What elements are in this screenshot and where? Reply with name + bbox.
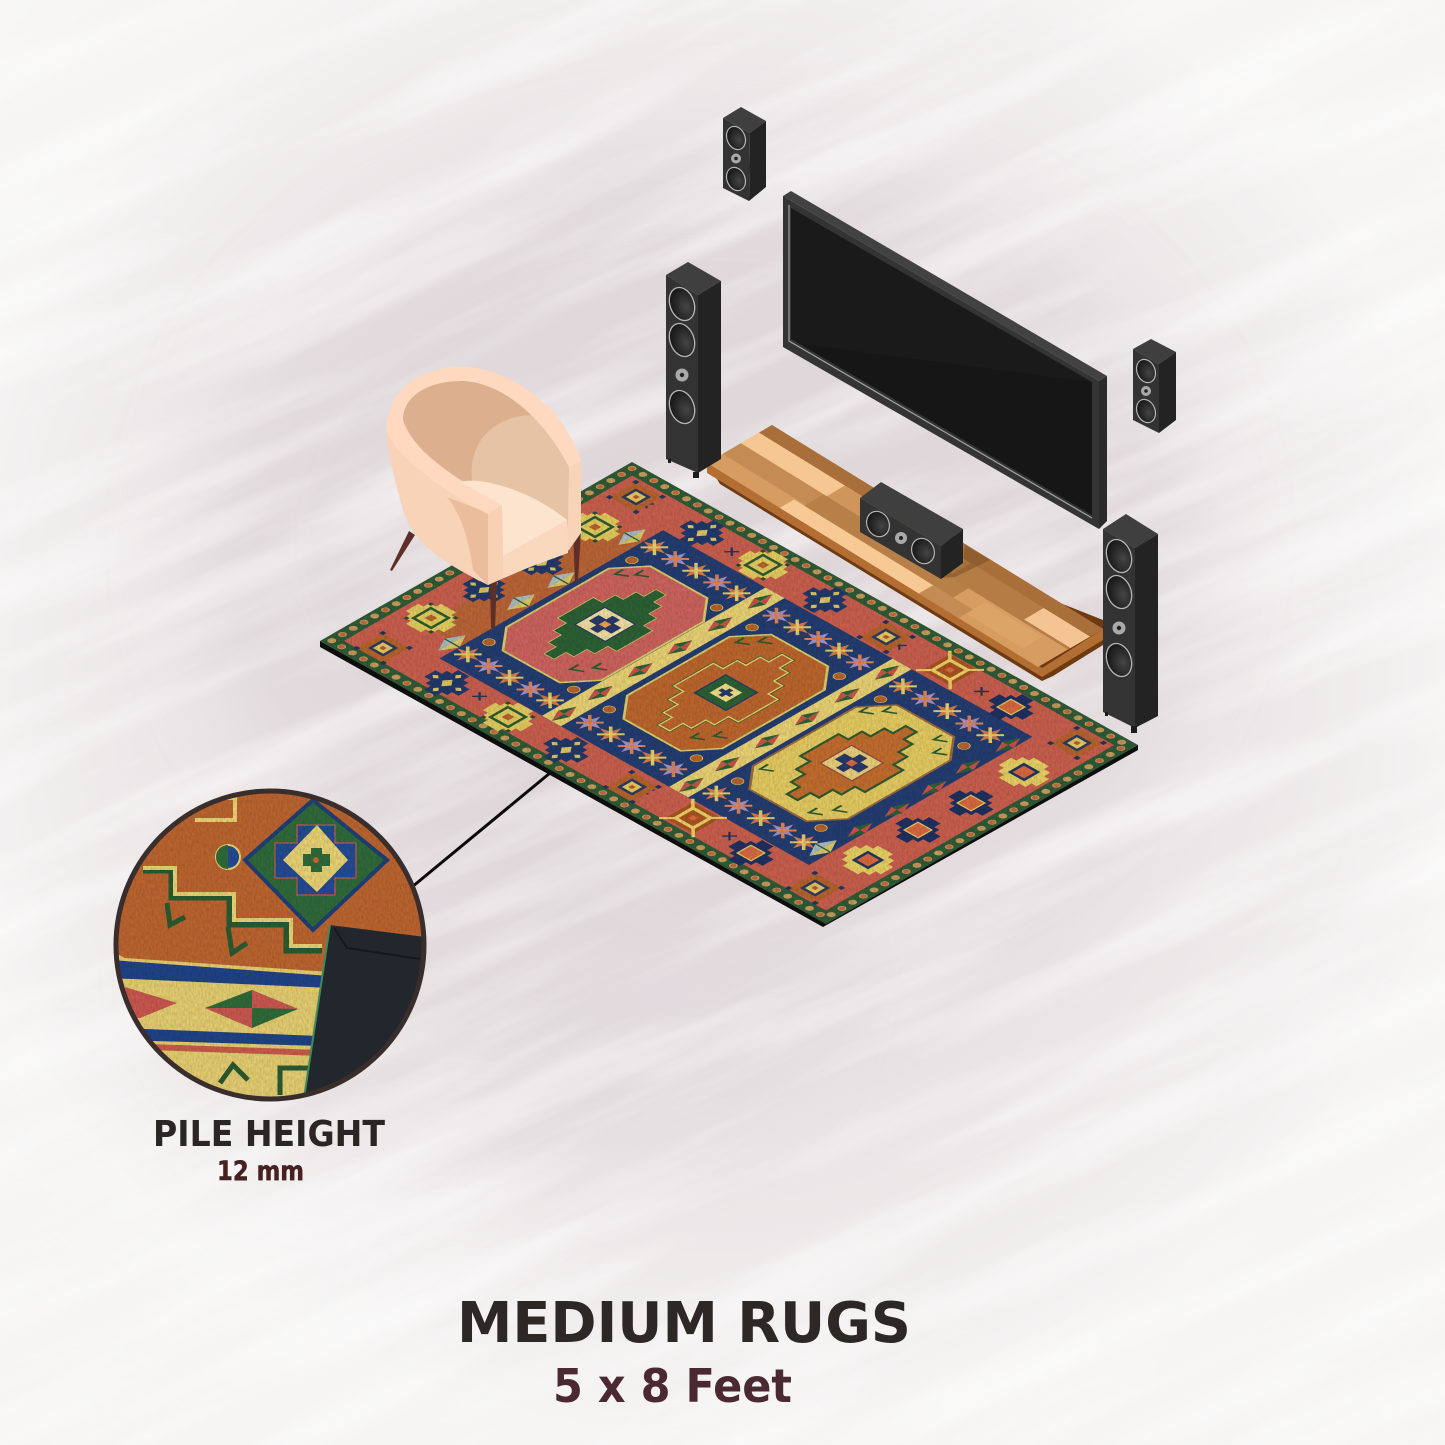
small navy stars	[446, 535, 1012, 854]
stepped yellow lines	[143, 870, 322, 950]
border motifs: short ends	[395, 506, 1060, 881]
bottom hook	[220, 1065, 248, 1083]
medallion three: yellow	[731, 694, 973, 832]
stripe diamonds	[546, 591, 905, 795]
medallion one: salmon	[484, 556, 726, 693]
chair side shadow	[447, 497, 488, 585]
tv stand	[707, 425, 1103, 681]
title	[457, 1291, 911, 1413]
right small speaker	[1133, 339, 1176, 433]
chair front panel	[503, 520, 568, 577]
right tower speaker	[1102, 514, 1158, 733]
leader line	[412, 773, 550, 887]
armchair	[386, 367, 581, 628]
yellow lower band	[118, 954, 322, 1096]
band diamonds	[205, 990, 298, 1028]
chair body	[386, 367, 581, 585]
border motifs: long top edge	[606, 480, 1107, 760]
subtitle: 5 x 8 Feet	[553, 1359, 792, 1413]
medallion two: orange	[605, 624, 847, 761]
chair inner back	[403, 381, 569, 520]
chair seat	[460, 481, 567, 556]
rug surface	[320, 462, 1138, 924]
chair back cushion	[472, 415, 569, 525]
corner dots	[480, 555, 973, 833]
pile height value: 12 mm	[217, 1156, 304, 1187]
chair rim	[386, 367, 581, 514]
small dot motif	[216, 845, 240, 869]
chair arm front	[488, 505, 503, 585]
green diamond	[245, 800, 387, 930]
folded backing	[306, 925, 422, 1092]
detail circle	[110, 785, 430, 1110]
television	[783, 191, 1107, 529]
top small speaker	[723, 107, 766, 201]
field crosses	[387, 500, 1078, 890]
pile height label: PILE HEIGHT	[153, 1114, 385, 1155]
left tower speaker	[665, 262, 721, 478]
center speaker	[860, 482, 963, 579]
title: MEDIUM RUGS	[457, 1291, 911, 1356]
pile height label	[153, 1114, 385, 1187]
rug	[320, 462, 1138, 927]
rug thickness edge	[320, 641, 1138, 927]
border motifs: long bottom edge	[353, 631, 845, 905]
